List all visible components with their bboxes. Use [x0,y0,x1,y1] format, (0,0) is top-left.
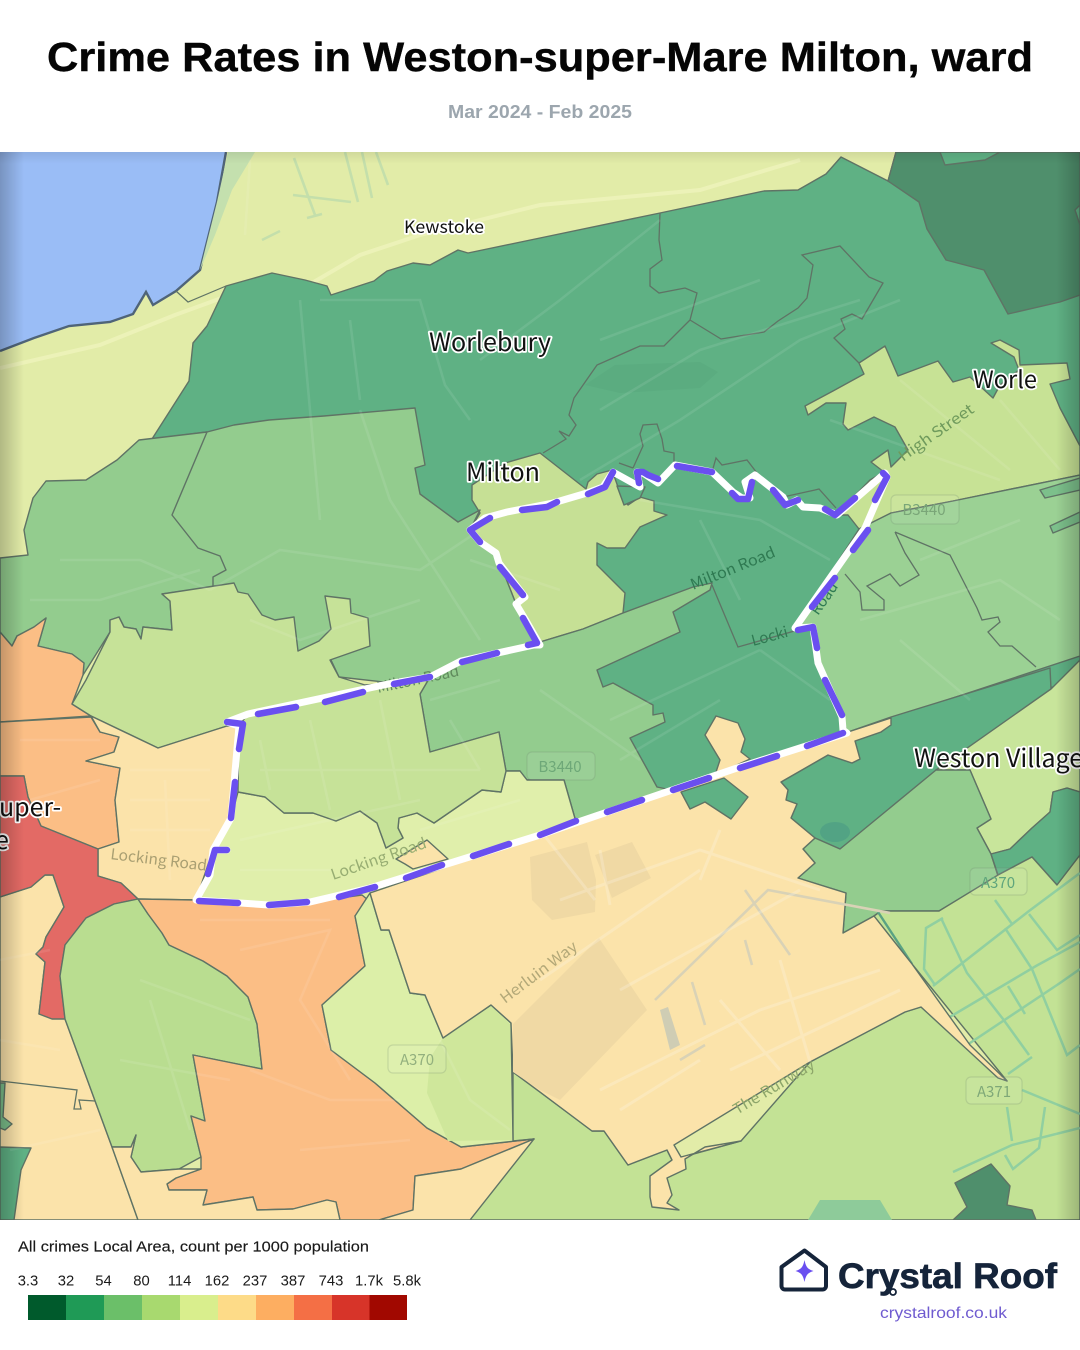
legend tick labels: 80 [133,1274,150,1290]
panel: choropleth map [0,152,1080,1220]
legend colour scale [28,1295,407,1320]
area: light green park [60,899,262,1172]
title: Crime Rates in Weston-super-Mare Milton, ward [47,34,1033,80]
area: green far east pocket [991,788,1080,885]
icon: house with star [782,1250,826,1290]
area: mid green north-west [152,408,540,683]
shield: A371 [966,1077,1022,1104]
legend tick labels: 54 [95,1274,112,1290]
grey block [660,1007,680,1050]
area: internal border Milton ward [712,585,798,647]
pond tint [820,822,850,842]
place label: Weston-super-Mare fragment: uper- [0,788,61,824]
minor road network [0,160,1060,1150]
road labels [109,398,978,1119]
area: light green far east [936,660,1080,854]
road label: Locking Road centre: Locking Road [328,832,429,885]
ward borders inside green [543,213,883,453]
legend tick labels: 3.3 [18,1274,38,1290]
area: Milton light green ward patch [470,453,667,642]
area: mid green east [795,475,1080,733]
place label: Kewstoke: Kewstoke [404,213,484,238]
south-east street grid [924,873,1080,1172]
logo wordmark: Crystal Roof [838,1257,1057,1296]
shield: A370 south: A370 [400,1049,434,1070]
south-west border line [0,1081,95,1109]
area: light green west of Milton Road [72,583,393,748]
small Milton internal lines [619,424,836,508]
legend tick labels: 237 [243,1274,267,1290]
area: Weston Village dark green [781,668,1051,849]
area: light green south of Milton Road [238,677,506,848]
area: mid green west [0,432,226,675]
east internal borders [845,532,1036,667]
Kewstoke teal lines [262,152,388,240]
shield: A370 east [970,868,1027,895]
area: cream bump in ward [705,716,750,775]
shield: B3440 north-east [891,495,959,524]
legend tick labels [18,1274,422,1290]
area: red hot-spot town centre [0,776,138,1019]
legend tick labels: 387 [281,1274,305,1290]
area: darker tint patch in Worlebury [585,362,718,393]
area: cream south-west [0,875,138,1220]
legend [18,1238,422,1320]
area: Kewstoke edge line [176,286,226,302]
road label: Locking Road west: Locking Road [109,843,208,876]
legend tick labels: 1.7k [355,1274,384,1290]
map edge vignette [0,152,1080,1220]
road label: Herluin Way: Herluin Way [495,936,582,1008]
logo url: crystalroof.co.uk [880,1305,1008,1322]
area: south-west green sliver [0,1083,12,1130]
shield: B3440 centre: B3440 [538,756,582,777]
area: pale green A370 [322,893,534,1147]
area: orange south [138,895,534,1220]
road shields [388,495,1027,1104]
road label: The Runway: The Runway [729,1054,819,1119]
area: cream notch by Locking Road [396,840,448,869]
legend title: All crimes Local Area, count per 1000 population [18,1238,369,1256]
shield: A371: A371 [977,1081,1011,1102]
area: south-west small green shapes [0,1147,31,1220]
legend tick labels: 114 [168,1274,191,1290]
purple dashes [199,466,887,905]
shield: B3440 centre [527,752,595,780]
area: cream airfield [370,718,1007,1210]
area: Worle light green [805,340,1080,529]
ward boundary: Milton [196,465,887,905]
area: pale band south of ward centre [204,770,576,878]
legend tick labels: 743 [319,1274,343,1290]
shield: A370 south [388,1045,446,1073]
shield: A370 east: A370 [981,872,1015,893]
legend tick labels: 5.8k [393,1274,422,1290]
area: east edge small dark strips [1040,478,1080,533]
area: darkest green north-east [888,152,1080,314]
area: mid green band along Milton Road [420,583,712,822]
road label: Milton Road west: Milton Road [375,660,461,698]
beach strip [200,152,255,270]
shield: B3440 north-east: B3440 [902,499,946,520]
Kewstoke pale road [0,160,800,368]
place label: Weston Village: Weston Village [914,739,1080,775]
area: orange north-west corner [0,618,91,722]
road label: High Street: High Street [894,398,978,466]
area: tan retail plots [513,842,651,1100]
teal edge strip [878,912,912,964]
road label: Road partial: Road [805,577,843,619]
subtitle: date range: Mar 2024 - Feb 2025 [448,101,632,122]
road label: Milton Road: Milton Road [687,541,778,595]
area: grey airfield strips [655,890,890,1060]
place label: Worle: Worle [973,360,1037,395]
area: south-east light green [470,855,1080,1220]
logo key glyph on y [890,1289,896,1295]
road label: Locking partial: Locki [749,621,790,651]
area: darker part of A370 patch [427,1006,512,1141]
coastline [0,152,226,351]
area: cream beside ward [86,716,239,900]
place labels [0,213,1080,857]
legend tick labels: 162 [205,1274,229,1290]
airfield pale road network [540,830,900,1110]
area: dark patch in Milton ward [617,486,645,505]
white boundary line [196,465,887,905]
area: orange west of centre [0,717,120,849]
water: Weston Bay [0,152,226,351]
place label: Milton: Milton [466,453,540,489]
legend tick labels: 32 [58,1274,74,1290]
area: dark patch south-east [953,1164,1036,1220]
area: teal patch bottom [808,1200,892,1220]
area: mid green south of Weston Village [798,770,998,933]
logo: Crystal Roof [782,1250,1057,1322]
place label: Worlebury: Worlebury [429,323,551,359]
area: cream bottom south [112,1135,534,1220]
area: green patch south of ward line [681,778,748,819]
area: Worlebury and Milton green base [152,152,1080,840]
